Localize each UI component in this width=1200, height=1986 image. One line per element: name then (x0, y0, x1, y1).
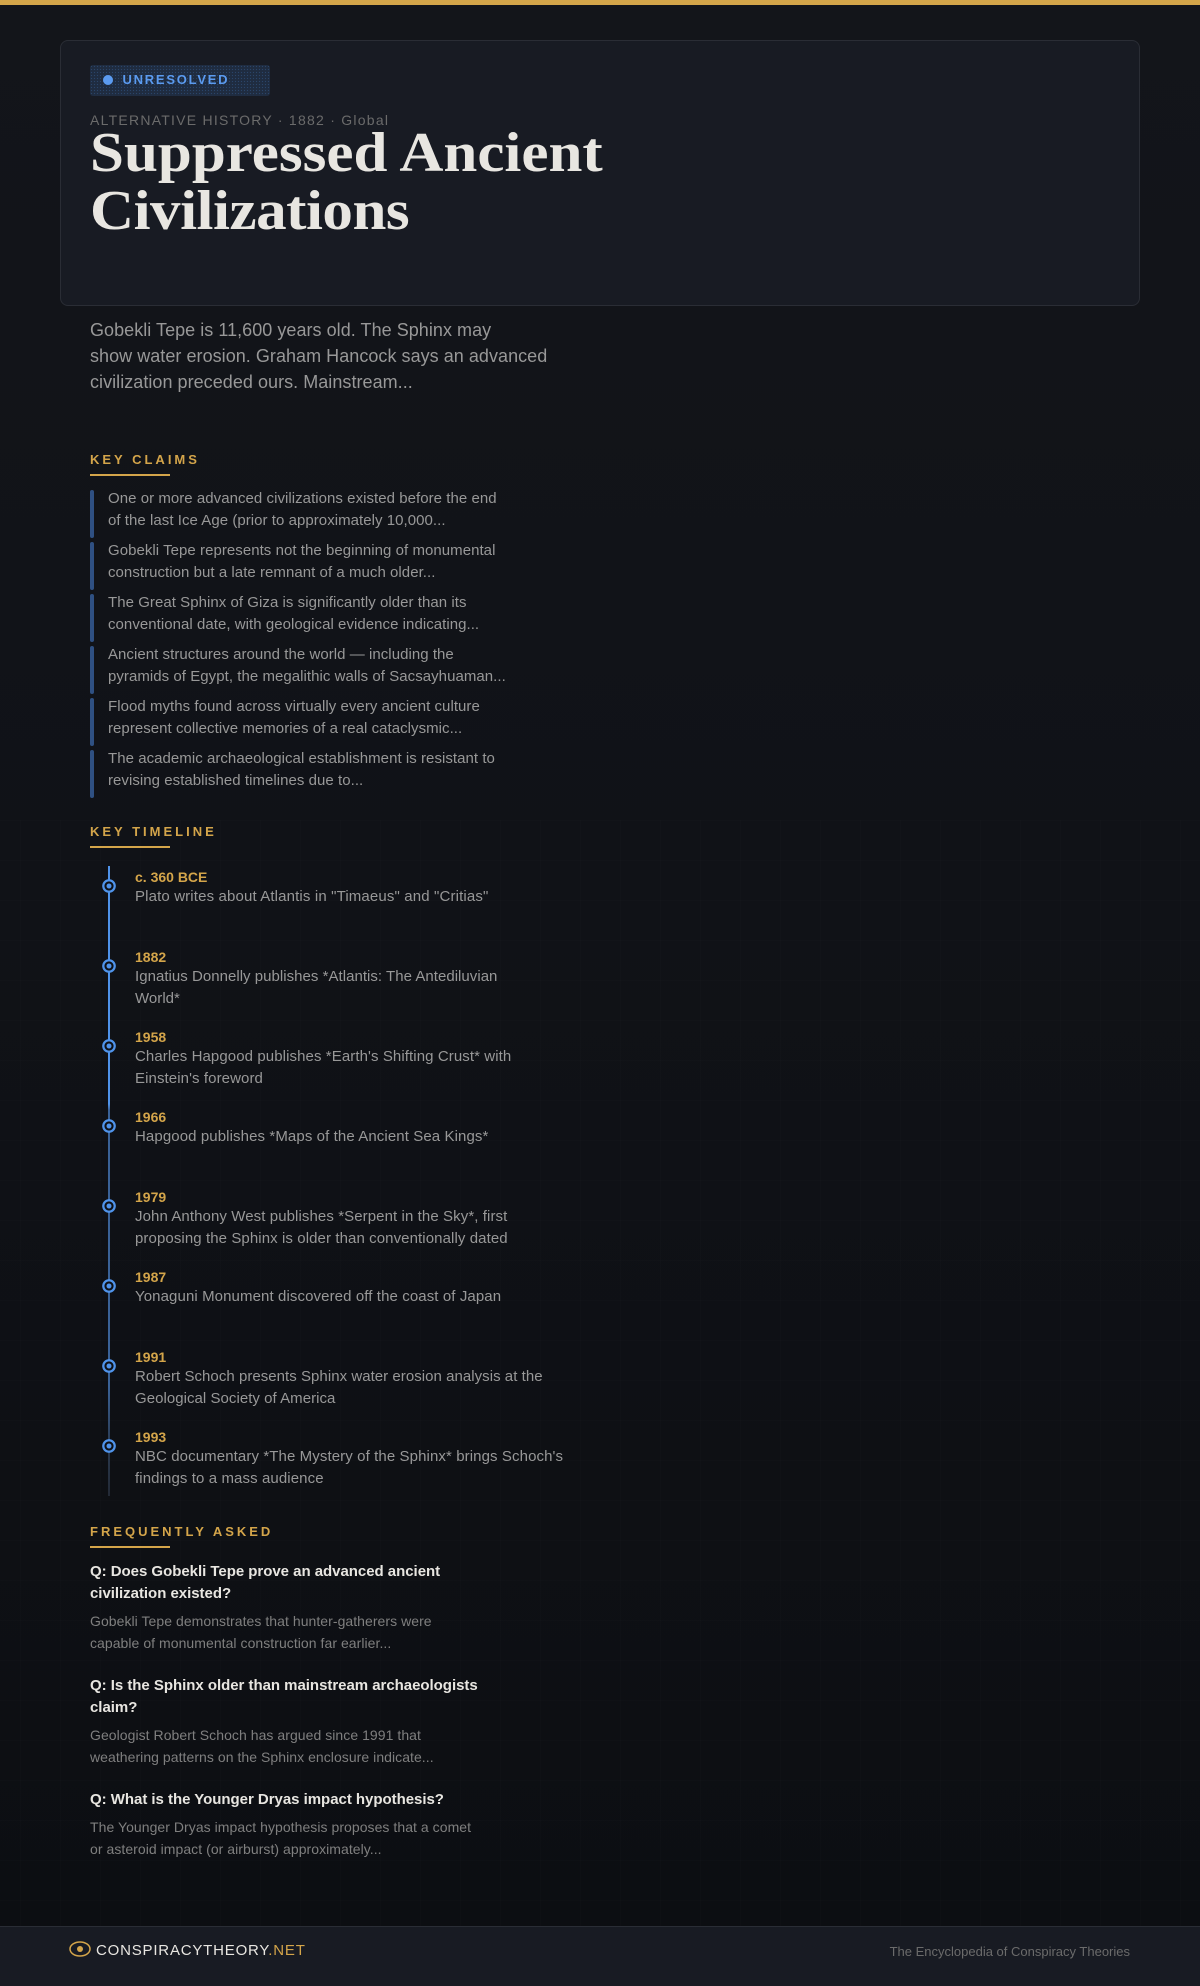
claim 3: The Great Sphinx of Giza is significantly older than its (108, 594, 467, 611)
claim 5: represent collective memories of a real cataclysmic... (108, 720, 462, 737)
event: c. 360 BCE: Plato writes about Atlantis in "Timaeus" and "Critias" (135, 888, 488, 905)
event: 1979: 1979 (135, 1189, 166, 1205)
event: 1991: Robert Schoch presents Sphinx water erosion analysis at the (135, 1368, 543, 1385)
timeline marker 7 (102, 1359, 116, 1373)
footer tagline: The Encyclopedia of Conspiracy Theories (890, 1944, 1130, 1959)
faq answer 1: Gobekli Tepe demonstrates that hunter-gatherers were (90, 1613, 432, 1629)
faq answer 1 (90, 1613, 432, 1651)
faq answer 1: capable of monumental construction far earlier... (90, 1635, 391, 1651)
faq question 3: Q: What is the Younger Dryas impact hypothesis? (90, 1791, 444, 1808)
claim 3: conventional date, with geological evidence indicating... (108, 616, 479, 633)
claim 2: Gobekli Tepe represents not the beginning of monumental (108, 542, 495, 559)
badge label: UNRESOLVED (122, 72, 229, 87)
event: 1882 (135, 949, 497, 1007)
faq answer 3: or asteroid impact (or airburst) approximately... (90, 1841, 382, 1857)
timeline marker 8 (102, 1439, 116, 1453)
timeline (108, 866, 110, 1496)
event: 1882: Ignatius Donnelly publishes *Atlantis: The Antediluvian (135, 968, 497, 985)
faq question 2: claim? (90, 1699, 137, 1716)
intro text (90, 320, 547, 392)
event: 1958: Einstein's foreword (135, 1070, 263, 1087)
title: Civilizations (90, 180, 409, 242)
event: 1987 (135, 1269, 501, 1305)
title (90, 122, 603, 242)
faq question 2 (90, 1677, 478, 1716)
event: 1993: 1993 (135, 1429, 166, 1445)
timeline marker 2 (102, 959, 116, 973)
timeline marker 6 (102, 1279, 116, 1293)
faq answer 3: The Younger Dryas impact hypothesis proposes that a comet (90, 1819, 471, 1835)
faq question 1: civilization existed? (90, 1585, 231, 1602)
claim 2 (90, 542, 510, 590)
faq question 1 (90, 1563, 440, 1602)
faq question 1: Q: Does Gobekli Tepe prove an advanced ancient (90, 1563, 440, 1580)
badge: unresolved status (90, 65, 270, 96)
faq question 2: Q: Is the Sphinx older than mainstream archaeologists (90, 1677, 478, 1694)
heading: key timeline: KEY TIMELINE (90, 824, 217, 839)
brand name: CONSPIRACYTHEORY.NET (96, 1942, 306, 1959)
top accent bar (0, 0, 1200, 5)
panel: hero header (60, 40, 1140, 306)
claim 6 (90, 750, 510, 798)
timeline marker 1 (102, 879, 116, 893)
event: 1882: 1882 (135, 949, 166, 965)
event: 1966 (135, 1109, 488, 1145)
claim 6: revising established timelines due to... (108, 772, 363, 789)
intro text: civilization preceded ours. Mainstream... (90, 372, 413, 392)
event: c. 360 BCE (135, 869, 488, 905)
claim 4 (90, 646, 510, 694)
faq answer 2: Geologist Robert Schoch has argued since 1991 that (90, 1727, 421, 1743)
event: 1993: findings to a mass audience (135, 1470, 324, 1487)
claim 2: construction but a late remnant of a much older... (108, 564, 435, 581)
event: 1987: 1987 (135, 1269, 166, 1285)
claim 1 (90, 490, 510, 538)
event: 1979: John Anthony West publishes *Serpent in the Sky*, first (135, 1208, 507, 1225)
faq answer 2: weathering patterns on the Sphinx enclosure indicate... (90, 1749, 434, 1765)
event: 1991: Geological Society of America (135, 1390, 335, 1407)
heading: frequently asked: FREQUENTLY ASKED (90, 1524, 273, 1539)
claim 3 (90, 594, 510, 642)
intro text: show water erosion. Graham Hancock says an advanced (90, 346, 547, 366)
heading: key claims: KEY CLAIMS (90, 452, 200, 467)
category and date line: ALTERNATIVE HISTORY · 1882 · Global (90, 112, 389, 128)
claim 4: pyramids of Egypt, the megalithic walls of Sacsayhuaman... (108, 668, 506, 685)
timeline axis (108, 866, 110, 1496)
panel: key claims list (90, 490, 506, 798)
intro text: Gobekli Tepe is 11,600 years old. The Sphinx may (90, 320, 491, 340)
icon: status dot (102, 75, 112, 85)
timeline marker 3 (102, 1039, 116, 1053)
event: c. 360 BCE: c. 360 BCE (135, 869, 207, 885)
event: 1991: 1991 (135, 1349, 166, 1365)
event: 1966: Hapgood publishes *Maps of the Ancient Sea Kings* (135, 1128, 488, 1145)
event: 1993: NBC documentary *The Mystery of the Sphinx* brings Schoch's (135, 1448, 563, 1465)
claim 5: Flood myths found across virtually every ancient culture (108, 698, 480, 715)
claim 5 (90, 698, 510, 746)
faq answer 3 (90, 1819, 471, 1857)
event: 1966: 1966 (135, 1109, 166, 1125)
timeline marker 5 (102, 1199, 116, 1213)
event: 1987: Yonaguni Monument discovered off the coast of Japan (135, 1288, 501, 1305)
event: 1958: 1958 (135, 1029, 166, 1045)
footer bar (0, 1926, 1200, 1986)
claim 1: of the last Ice Age (prior to approximately 10,000... (108, 512, 446, 529)
title: Suppressed Ancient (90, 122, 603, 184)
faq answer 2 (90, 1727, 434, 1765)
event: 1958: Charles Hapgood publishes *Earth's Shifting Crust* with (135, 1048, 511, 1065)
event: 1993 (135, 1429, 563, 1487)
event: 1991 (135, 1349, 543, 1407)
timeline marker 4 (102, 1119, 116, 1133)
icon: eye logo (69, 1941, 91, 1957)
claim 1: One or more advanced civilizations existed before the end (108, 490, 497, 507)
event: 1882: World* (135, 990, 180, 1007)
claim 6: The academic archaeological establishment is resistant to (108, 750, 495, 767)
event: 1979 (135, 1189, 508, 1247)
event: 1979: proposing the Sphinx is older than conventionally dated (135, 1230, 508, 1247)
claim 4: Ancient structures around the world — including the (108, 646, 454, 663)
event: 1958 (135, 1029, 511, 1087)
